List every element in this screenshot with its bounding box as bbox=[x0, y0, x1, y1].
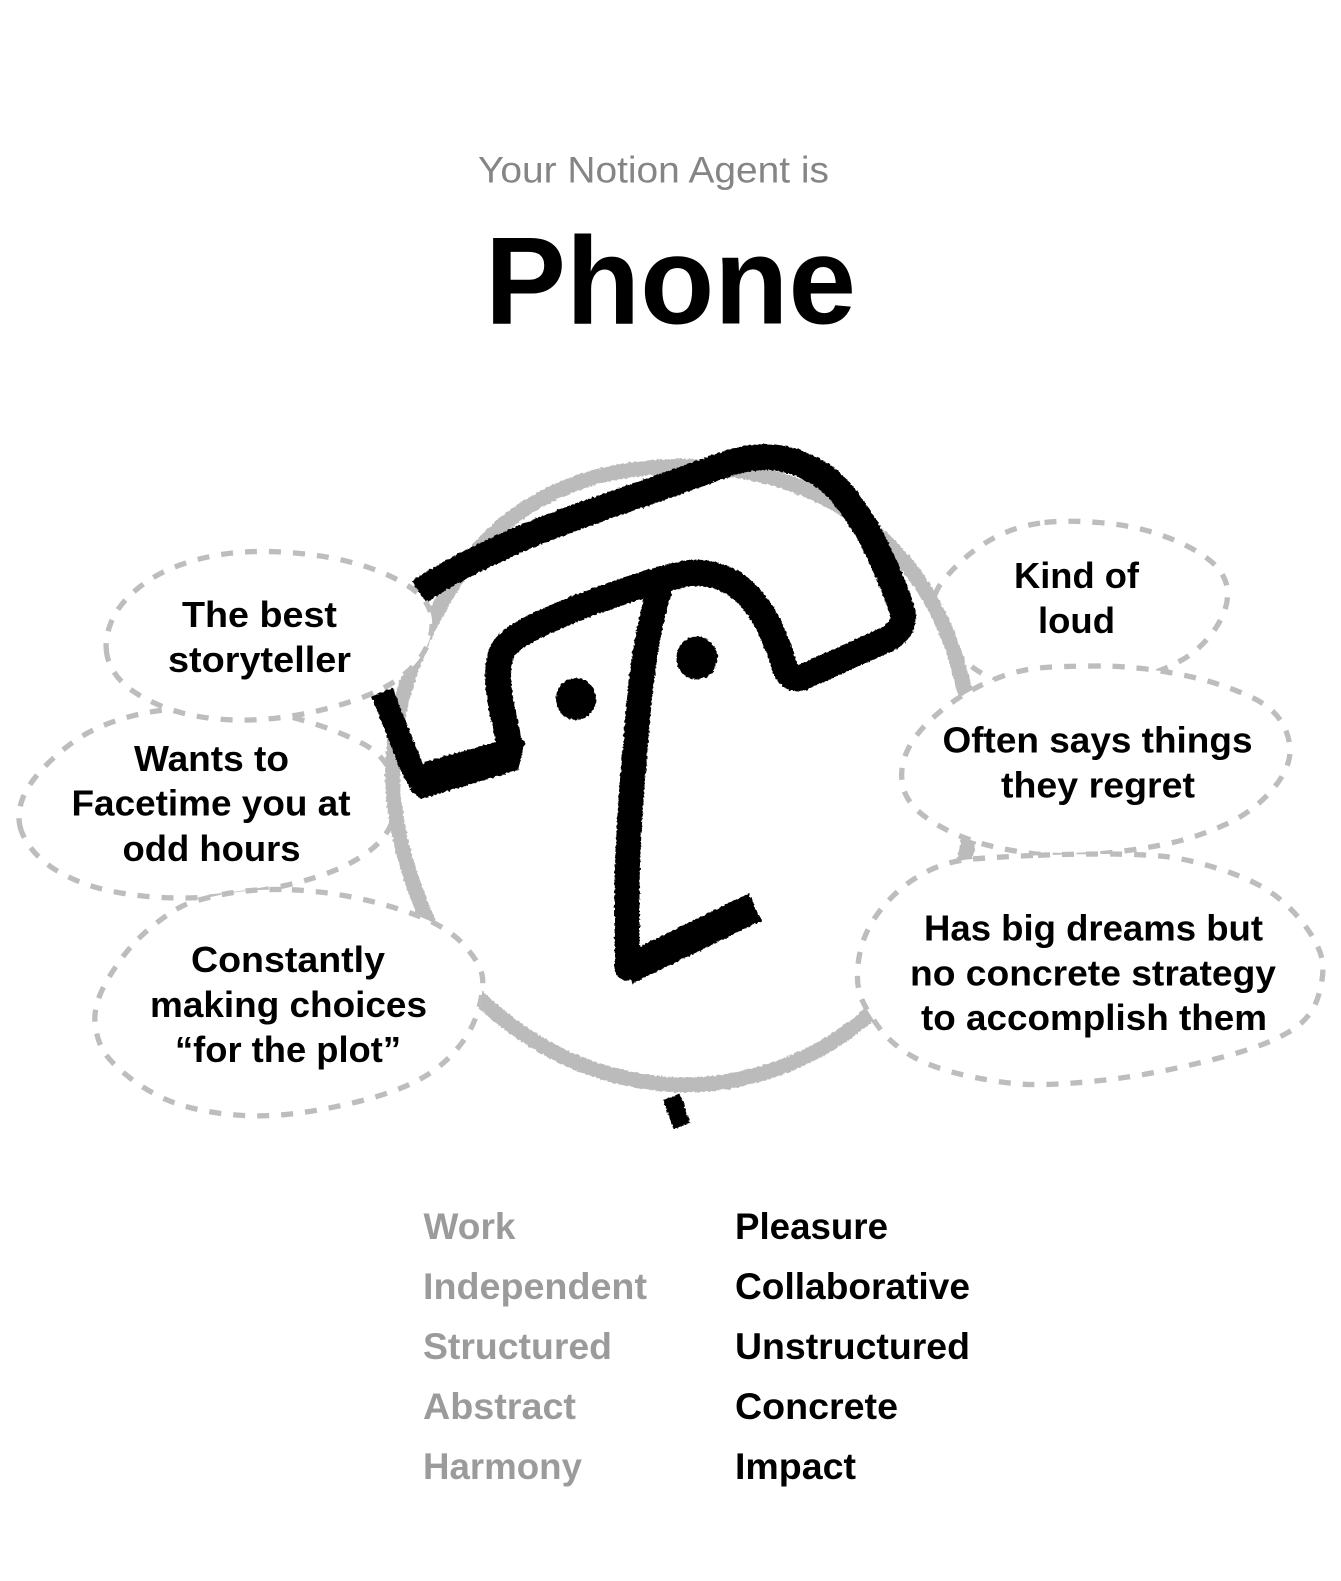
trait list: Concrete bbox=[735, 1386, 898, 1427]
bubble: choices: “for the plot” bbox=[175, 1029, 401, 1070]
bubble: regret: Often says things bbox=[942, 720, 1252, 760]
bubble: dreams: to accomplish them bbox=[921, 997, 1267, 1038]
title: Phone bbox=[485, 212, 856, 350]
bubble: loud bbox=[934, 521, 1228, 690]
icon: phone face bbox=[382, 457, 974, 1126]
trait list: Impact bbox=[735, 1446, 856, 1487]
bubble: storyteller bbox=[106, 552, 432, 720]
bubble: choices bbox=[95, 889, 483, 1116]
bubble: regret: they regret bbox=[1001, 764, 1195, 806]
chin mark bbox=[672, 1097, 682, 1126]
trait list: Collaborative bbox=[735, 1266, 970, 1307]
trait list: Work bbox=[424, 1206, 516, 1247]
trait list: Unstructured bbox=[735, 1326, 970, 1367]
trait list: Independent bbox=[423, 1266, 647, 1307]
handset bbox=[419, 457, 903, 745]
handset left arm bbox=[382, 692, 420, 782]
handset lower bar bbox=[410, 733, 525, 799]
bubble: facetime: Facetime you at bbox=[72, 782, 350, 824]
bubble: dreams bbox=[857, 854, 1323, 1085]
bubble: loud: Kind of bbox=[1014, 555, 1140, 596]
bubble: loud: loud bbox=[1038, 600, 1115, 641]
bubble: storyteller: storyteller bbox=[168, 639, 351, 680]
trait list: Harmony bbox=[423, 1446, 582, 1487]
bubble: storyteller: The best bbox=[182, 594, 337, 635]
trait list: Structured bbox=[423, 1326, 612, 1367]
trait list bbox=[423, 1206, 970, 1487]
bubble: facetime: odd hours bbox=[122, 828, 300, 869]
trait list: Abstract bbox=[423, 1386, 576, 1427]
bubble: choices: making choices bbox=[150, 984, 427, 1025]
bubble: dreams: no concrete strategy bbox=[910, 952, 1277, 994]
face circle bbox=[393, 466, 974, 1085]
left eye bbox=[556, 678, 596, 720]
nose arm bbox=[626, 907, 755, 970]
right eye bbox=[676, 636, 718, 680]
trait list: Pleasure bbox=[735, 1206, 888, 1247]
bubble: facetime: Wants to bbox=[134, 738, 289, 779]
bubble: choices: Constantly bbox=[191, 939, 386, 980]
bubble: facetime bbox=[19, 707, 396, 898]
nose bbox=[627, 592, 659, 968]
bubble: dreams: Has big dreams but bbox=[924, 908, 1263, 948]
subtitle: Your Notion Agent is bbox=[478, 150, 829, 190]
bubble: regret bbox=[902, 666, 1290, 856]
